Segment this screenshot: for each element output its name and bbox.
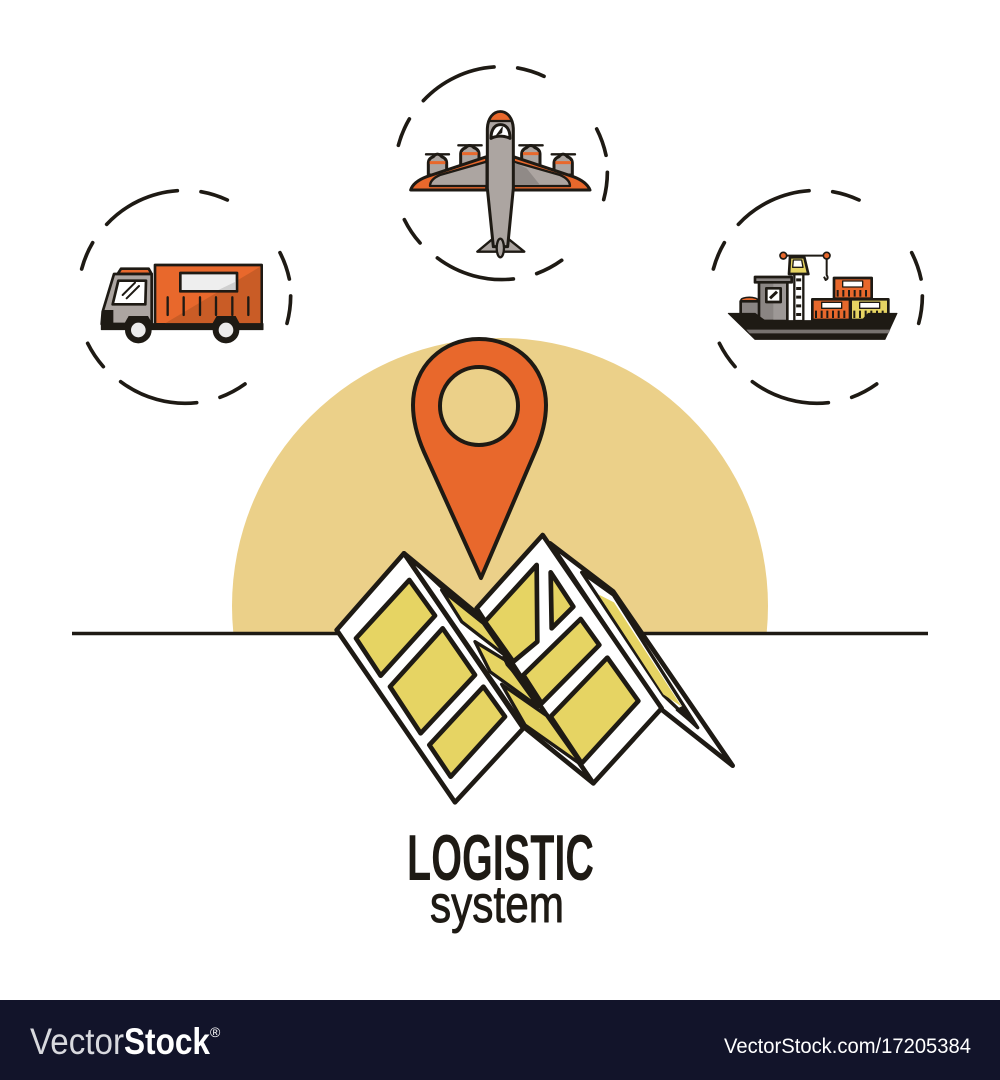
icon: plane [411,112,590,257]
map left panel [337,553,523,802]
ship cabin [741,297,758,303]
footer logo: VectorStock [30,1021,225,1062]
sun semicircle [232,338,768,632]
icon: cargo ship [728,252,897,339]
subtitle: system: system [430,876,564,934]
title: LOGISTIC: LOGISTIC [407,821,594,894]
truck cab [118,269,152,274]
ship hull [728,313,897,339]
plane fuselage [487,112,513,247]
icon: truck [101,265,263,340]
horizon line [72,632,928,635]
icon: dashed ring around ship [713,191,922,403]
plane engines [426,145,575,175]
footer logo: ® [210,1024,221,1040]
map right panel [477,535,662,783]
map lower fold [502,684,593,783]
footer bar [0,1000,1000,1080]
plane wings [411,157,487,190]
map far right fold [550,543,733,766]
icon: location pin [413,339,546,578]
plane tail [477,238,524,252]
icon: dashed ring around plane [398,67,607,280]
ship containers [812,278,888,320]
icon: dashed ring around truck [82,191,291,403]
truck chassis [101,324,263,330]
ship crane [780,252,830,321]
truck cargo box [155,265,262,324]
icon: folded map [337,535,733,802]
footer image id: VectorStock.com/17205384 [724,1035,971,1058]
map middle fold [404,553,547,727]
truck wheels [128,320,149,340]
